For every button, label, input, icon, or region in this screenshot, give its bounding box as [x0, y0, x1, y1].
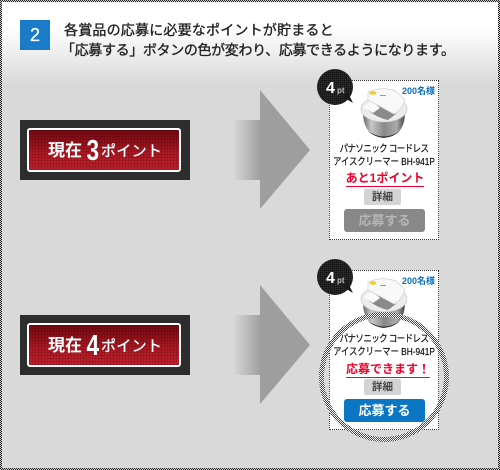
active apply button	[344, 399, 425, 422]
heading text	[61, 22, 455, 58]
product image	[360, 88, 408, 138]
step number badge: 2	[30, 25, 40, 45]
current points button: 4 points: 4	[87, 330, 99, 362]
step number badge	[20, 20, 50, 50]
current points button: 4 points: 現在 ポイント	[48, 336, 162, 355]
points badge: bottom card	[317, 259, 353, 295]
prize card: eligible	[329, 270, 439, 430]
winner count: 200名様	[402, 86, 435, 96]
product image	[360, 278, 408, 328]
points badge: top card: pt	[337, 86, 345, 95]
winner count: 200名様	[402, 276, 435, 286]
eligible message: 応募できます！	[346, 362, 430, 376]
prize card: eligible: アイスクリーマー BH-941P	[333, 347, 435, 358]
prize card: not yet eligible	[329, 80, 439, 240]
arrow: bottom row	[237, 285, 310, 404]
heading text: 各賞品の応募に必要なポイントが貯まると	[64, 22, 334, 38]
heading text: 「応募する」ボタンの色が変わり、応募できるようになります。	[61, 42, 455, 58]
points badge: top card	[317, 69, 353, 105]
prize card: not yet eligible: アイスクリーマー BH-941P	[333, 157, 435, 168]
current points button: 3 points: 3	[87, 135, 99, 167]
details button: 詳細	[372, 381, 393, 393]
details button: 詳細	[372, 191, 393, 203]
current points button: 3 points	[20, 120, 190, 180]
shortfall message: あと1ポイント	[346, 171, 424, 185]
disabled apply button	[344, 209, 425, 232]
points badge: bottom card: 4	[326, 270, 335, 287]
current points button: 4 points	[20, 315, 190, 375]
arrow: top row	[237, 90, 310, 209]
product name: パナソニック コードレス	[340, 144, 428, 155]
product name: パナソニック コードレス	[340, 334, 428, 345]
details button	[364, 189, 401, 205]
disabled apply button: 応募する	[358, 213, 410, 228]
points badge: bottom card: pt	[337, 276, 345, 285]
points badge: top card: 4	[326, 80, 335, 97]
highlight circle	[319, 312, 449, 442]
current points button: 3 points: 現在 ポイント	[48, 141, 162, 160]
active apply button: 応募する	[358, 403, 410, 418]
details button	[364, 379, 401, 395]
